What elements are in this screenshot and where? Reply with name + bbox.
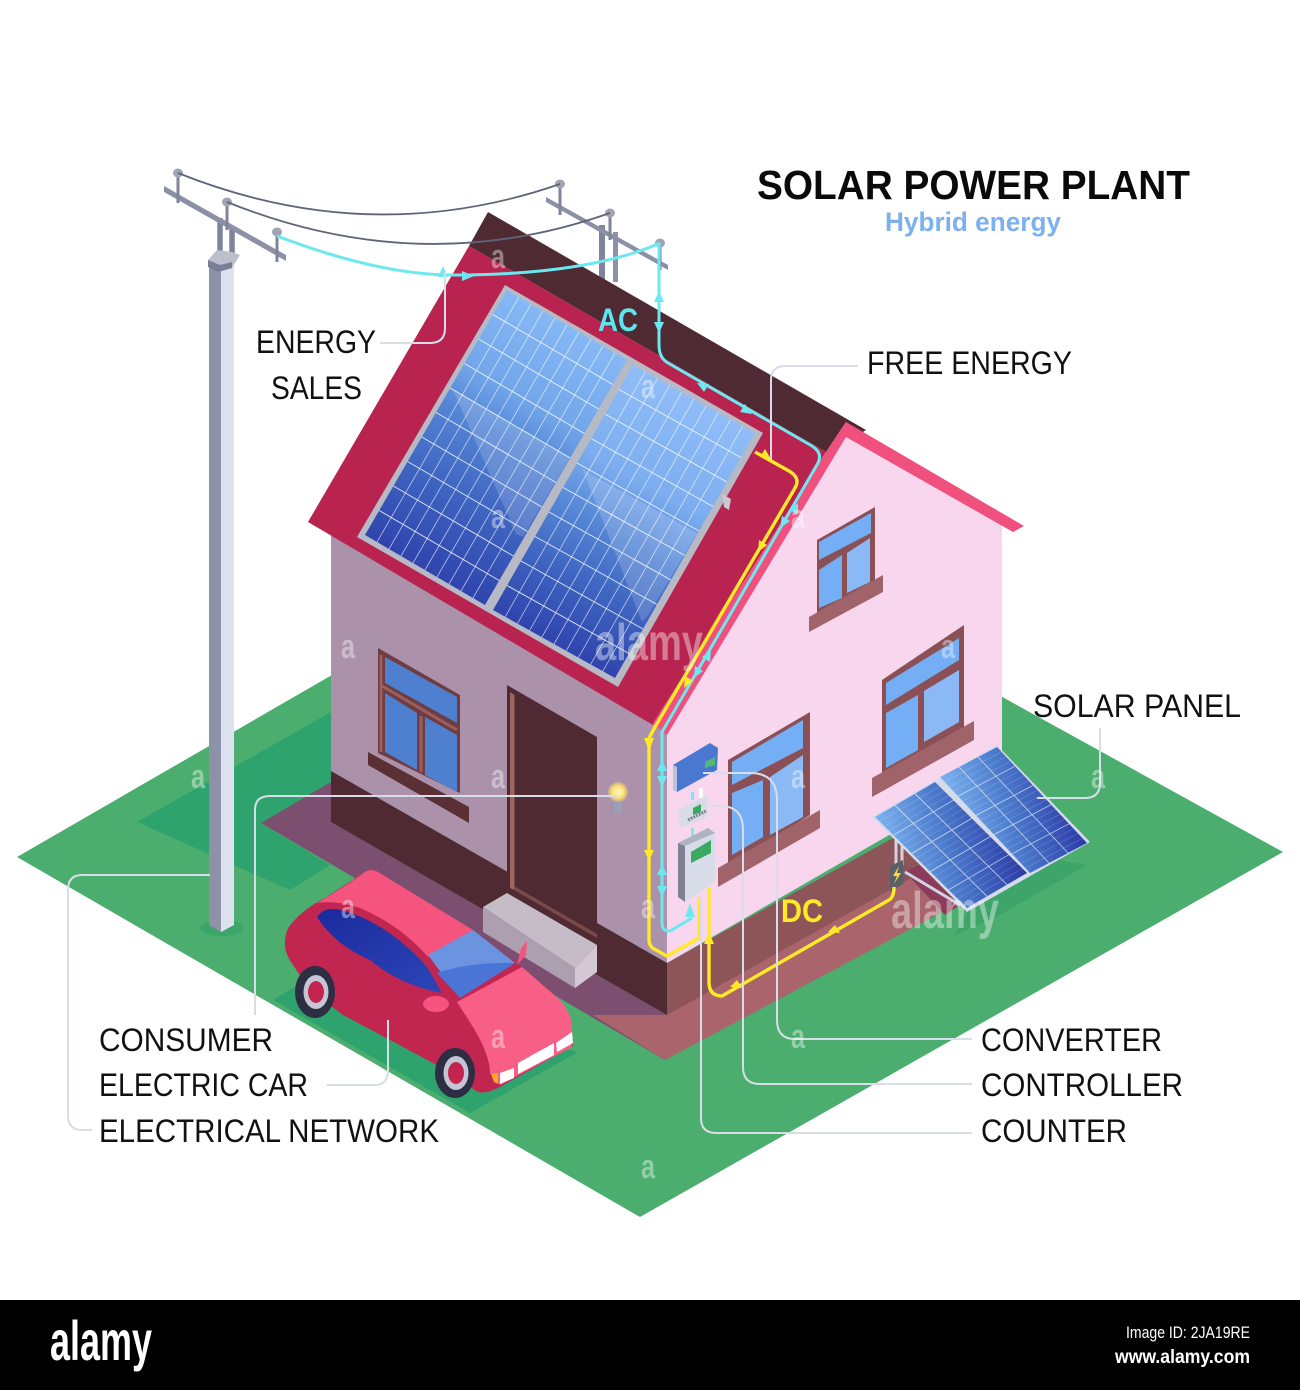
watermark glyphs: a (1091, 758, 1106, 796)
pole cap (208, 250, 240, 272)
rear wheel (295, 966, 335, 1018)
callout labels (99, 324, 1241, 1149)
leader free energy (771, 366, 858, 460)
footer logo: alamy (50, 1309, 152, 1372)
crossarm (164, 186, 286, 261)
front step (483, 893, 597, 988)
panel right (493, 365, 755, 678)
cyan grid wire (277, 236, 660, 275)
front utility pole (164, 168, 286, 936)
upper right window (809, 507, 883, 632)
car body (285, 870, 573, 1092)
electric car (285, 870, 573, 1098)
watermark glyphs: a (941, 628, 956, 666)
right plinth (667, 812, 940, 1015)
leader electric car (327, 1020, 388, 1085)
junction box (890, 860, 903, 892)
wall lamp (608, 782, 628, 813)
label converter: CONVERTER (981, 1022, 1162, 1058)
watermark glyphs: a (191, 758, 206, 796)
watermark glyphs: a (491, 498, 506, 536)
watermark glyphs: a (641, 1148, 656, 1186)
panel frame (872, 745, 1090, 912)
leader solar panel (1037, 728, 1100, 798)
converter box (673, 743, 718, 792)
right gable wall (667, 430, 1002, 963)
watermark glyphs: a (491, 1018, 506, 1056)
controller (678, 788, 707, 828)
footer url: www.alamy.com (1114, 1347, 1250, 1368)
pole base shadow (200, 920, 244, 936)
overhead wires (178, 173, 660, 275)
panel frame (357, 285, 763, 687)
DC wiring (649, 452, 894, 996)
sub panel right (940, 747, 1087, 873)
left plinth (331, 771, 667, 1015)
front left window (368, 648, 469, 823)
grille (518, 1043, 554, 1074)
label electrical network: ELECTRICAL NETWORK (99, 1113, 439, 1149)
rear utility pole crossarm (546, 180, 668, 285)
flow arrows (644, 291, 840, 988)
watermark glyphs: a (341, 628, 356, 666)
gable fascia right (846, 422, 1024, 532)
label consumer: CONSUMER (99, 1022, 273, 1058)
windshield (428, 930, 515, 998)
watermark glyphs: alamy (595, 614, 703, 672)
panel left (365, 290, 627, 605)
label electric car: ELECTRIC CAR (99, 1067, 308, 1103)
wire from controller to counter (691, 828, 694, 836)
footer image id: Image ID: 2JA19RE (1126, 1323, 1250, 1342)
roof solar array (357, 285, 763, 687)
stock footer bar (0, 1300, 1300, 1390)
AC wiring (659, 244, 820, 931)
watermark glyphs: a (491, 758, 506, 796)
side mirror (423, 996, 449, 1012)
watermark glyphs: a (791, 498, 806, 536)
label controller: CONTROLLER (981, 1067, 1183, 1103)
leader counter (701, 895, 972, 1133)
watermark glyphs: a (341, 888, 356, 926)
left headlight (491, 1068, 514, 1084)
label energy sales: ENERGY (256, 324, 376, 360)
DC label: DC (781, 893, 823, 929)
under panel shade (905, 862, 960, 915)
right headlight (556, 1032, 573, 1052)
cyan arrows (654, 291, 798, 917)
side window (317, 909, 442, 993)
watermark glyphs (191, 238, 1106, 1186)
sub panel left (875, 782, 1027, 908)
label energy sales: SALES (271, 370, 362, 406)
gable fascia left (653, 422, 846, 735)
grid wire arrows (438, 266, 474, 281)
panel stand (896, 832, 960, 905)
leader consumer (255, 796, 618, 1015)
ground plot (17, 497, 1283, 1217)
pole stems (220, 218, 232, 255)
counter (678, 828, 715, 902)
middle right window (718, 712, 820, 887)
roof back slope (469, 212, 866, 452)
watermark glyphs: alamy (891, 882, 999, 940)
leader controller (710, 806, 972, 1084)
label solar panel: SOLAR PANEL (1033, 688, 1241, 724)
inverter equipment on wall (673, 743, 718, 902)
label counter: COUNTER (981, 1113, 1127, 1149)
hood (457, 967, 572, 1085)
subtitle: Hybrid energy (885, 207, 1061, 237)
front door (507, 685, 597, 940)
leader energy sales (380, 272, 445, 343)
far mirror (517, 941, 527, 965)
yellow arrows (644, 449, 840, 988)
watermark glyphs: a (791, 758, 806, 796)
house (308, 212, 1024, 1015)
lower right window (872, 625, 974, 797)
watermark glyphs: a (641, 368, 656, 406)
panel shadow (955, 850, 1087, 935)
leader converter (703, 773, 972, 1039)
house and yard shadow (137, 712, 950, 1113)
ground solar panel (872, 745, 1090, 935)
glass reflections (453, 390, 697, 622)
watermark glyphs: a (641, 888, 656, 926)
watermark glyphs: a (791, 1018, 806, 1056)
car roof (317, 870, 473, 957)
watermark glyphs: a (491, 238, 506, 276)
callout leader lines (68, 272, 1100, 1133)
front wheel (435, 1048, 475, 1098)
pole shaft (209, 262, 221, 932)
main roof slope (308, 246, 826, 725)
AC label: AC (598, 302, 638, 338)
title: SOLAR POWER PLANT (757, 162, 1190, 208)
label energy sales (256, 324, 376, 406)
left wall (331, 530, 667, 963)
label free energy: FREE ENERGY (867, 345, 1072, 381)
insulators (173, 168, 282, 262)
leader electrical network (68, 875, 210, 1130)
